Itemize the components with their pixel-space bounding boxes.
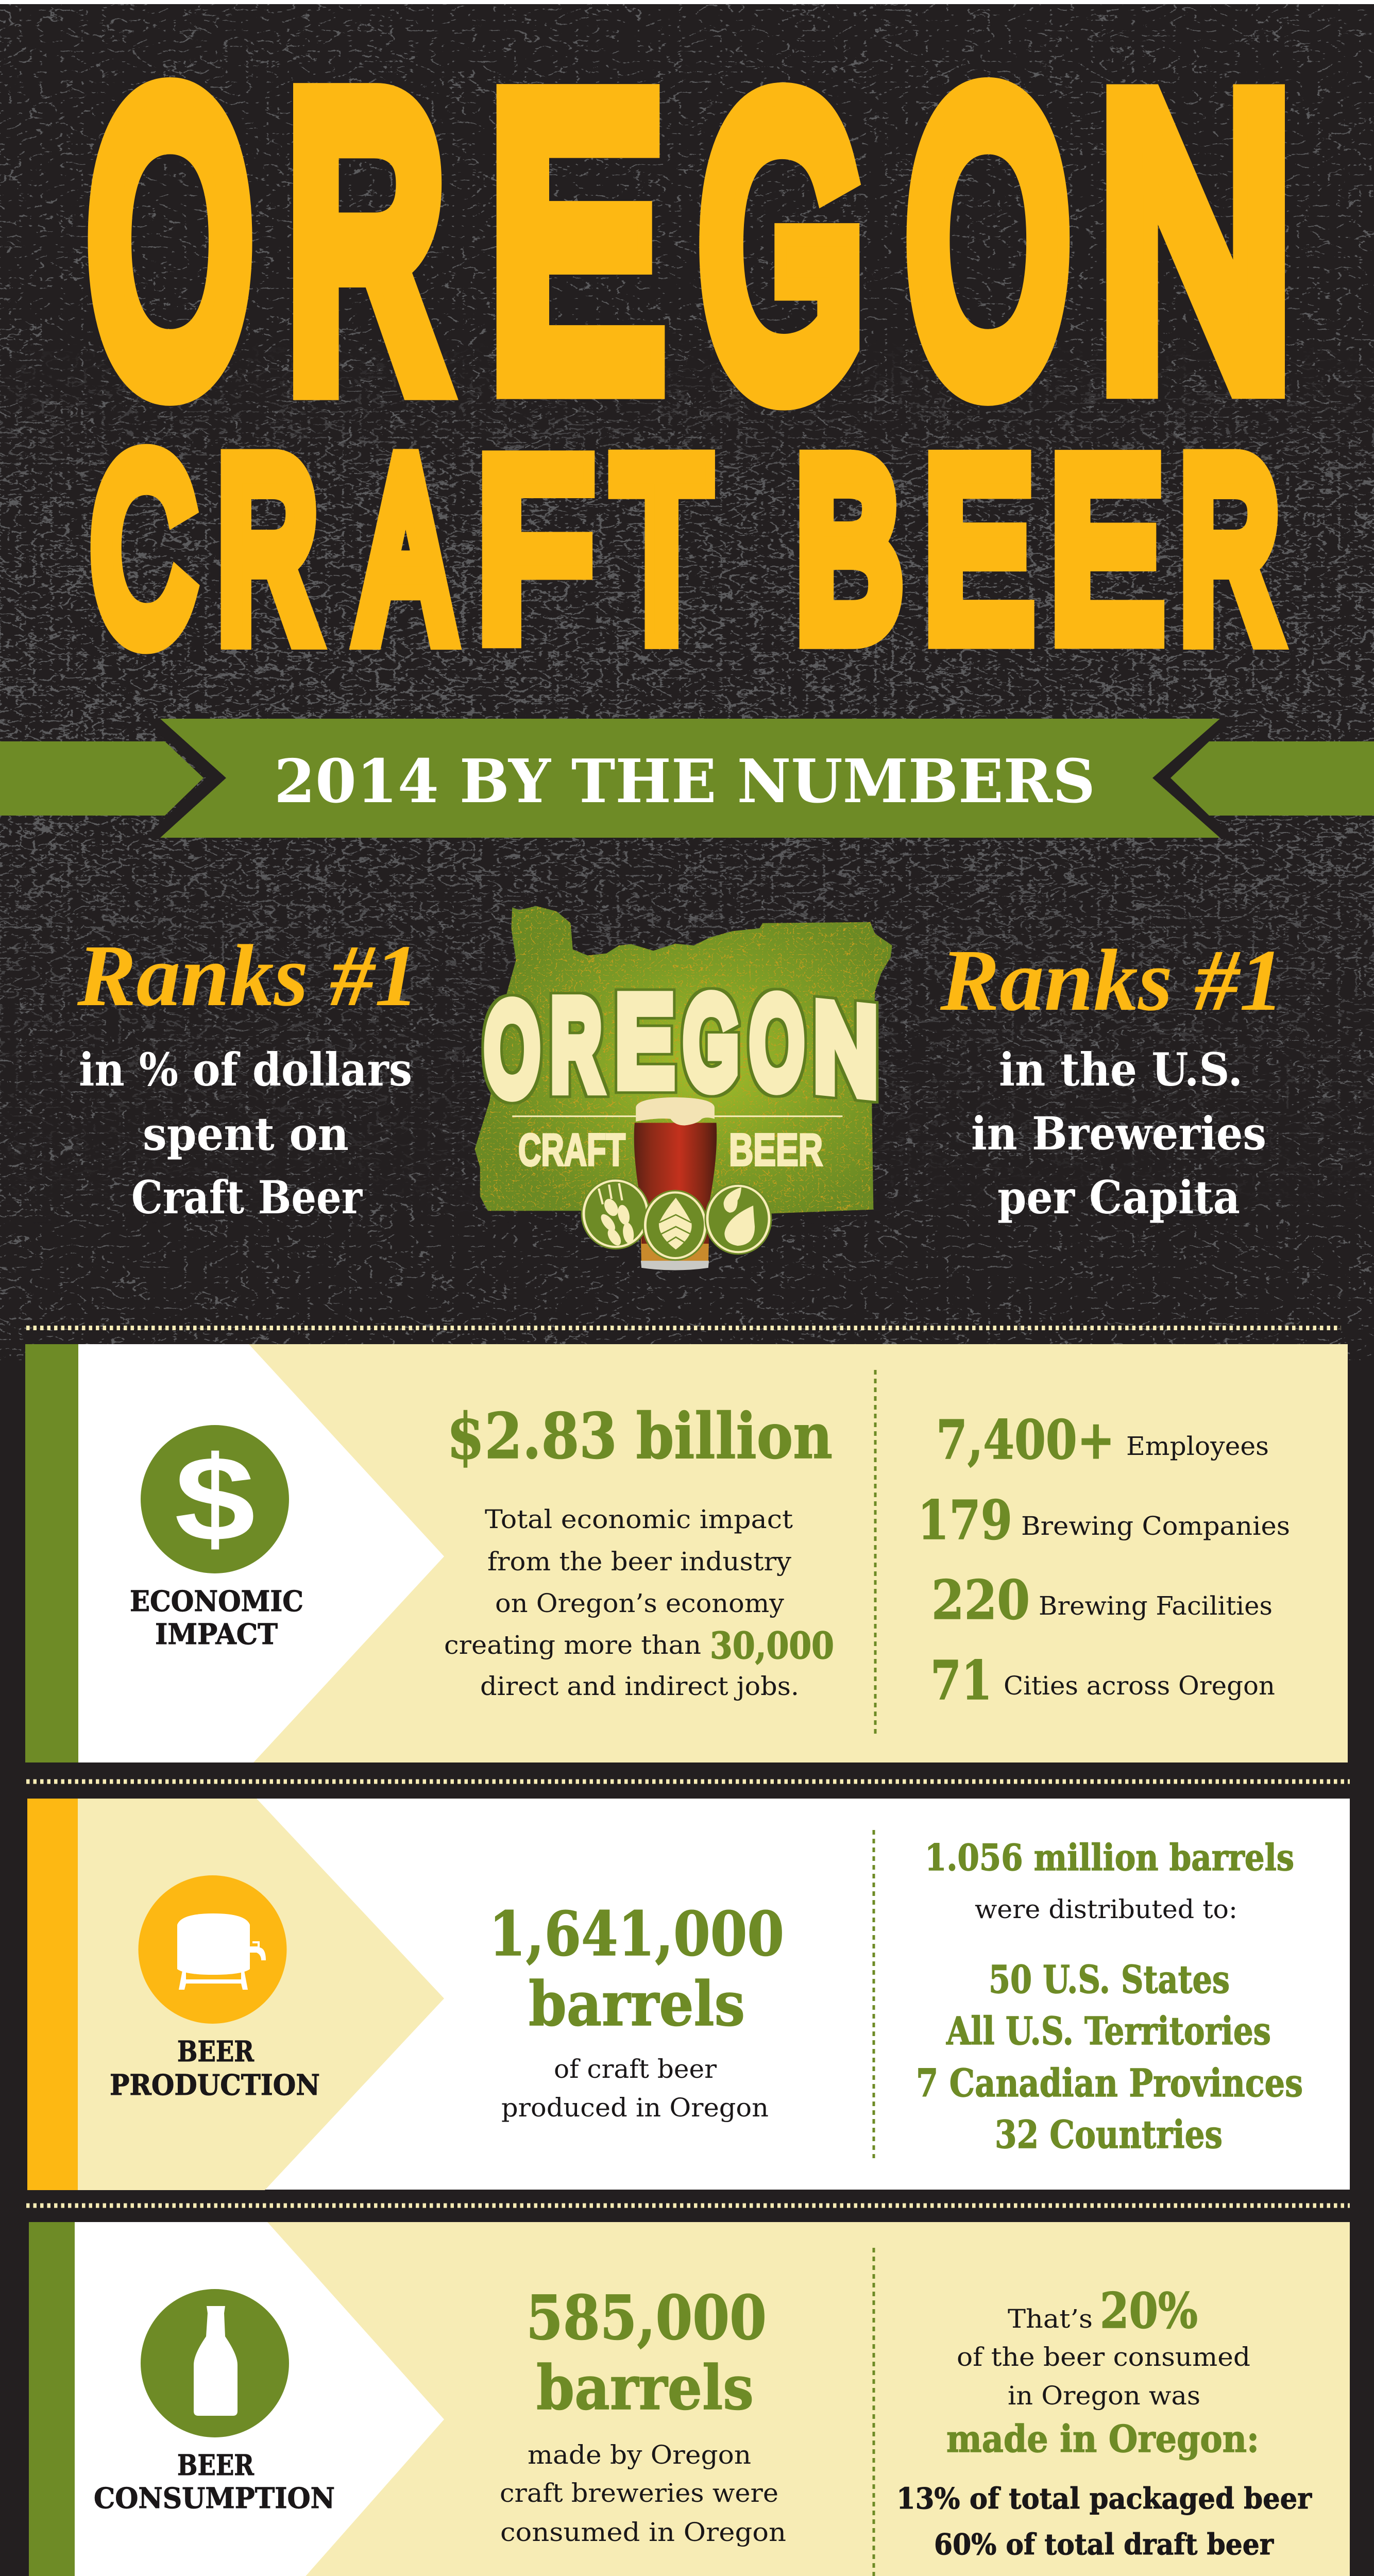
list: economic figures: 220	[931, 1568, 1030, 1632]
body: total economic impact: 30,000	[710, 1624, 834, 1667]
stat: 1,641,000 barrels: 1,641,000	[489, 1898, 784, 1970]
heading: beer production: PRODUCTION	[110, 2068, 320, 2102]
title: CRAFT BEER: R	[1181, 412, 1279, 686]
body: total economic impact	[444, 1504, 834, 1701]
stat: $2.83 billion: $2.83 billion	[447, 1399, 833, 1473]
list: economic figures: 7,400+	[936, 1408, 1115, 1471]
badge: hop	[642, 1190, 708, 1261]
title: OREGON	[90, 19, 1292, 468]
Oregon Craft Beer logo	[475, 906, 892, 1270]
badge: water drops	[705, 1183, 772, 1255]
list: economic figures: 179	[918, 1488, 1012, 1552]
dotted divider 1	[26, 1326, 1341, 1330]
list: share of beer consumed: That’s	[1008, 2304, 1093, 2334]
list: distribution: 50 U.S. States	[989, 1958, 1230, 2002]
body: total economic impact: on Oregon’s economy	[495, 1588, 785, 1618]
stat: 585,000 barrels: 585,000	[526, 2282, 767, 2353]
icon: dollar sign	[141, 1425, 289, 1573]
list: share of beer consumed: of the beer consumed	[957, 2342, 1250, 2372]
logo words CRAFT BEER	[518, 1124, 823, 1175]
heading: economic impact: IMPACT	[155, 1617, 278, 1651]
icon: brewing tank	[138, 1875, 286, 2024]
heading: beer consumption: BEER	[177, 2448, 255, 2482]
title: CRAFT BEER: E	[1051, 412, 1161, 686]
body: total economic impact: Total economic impact	[485, 1504, 793, 1534]
panel: beer production	[27, 1799, 1350, 2190]
title: CRAFT BEER: A	[362, 412, 450, 686]
body: made by Oregon craft breweries	[500, 2440, 786, 2547]
heading: economic impact: ECONOMIC	[130, 1584, 303, 1618]
list: share of beer consumed: made in Oregon:	[946, 2417, 1259, 2461]
title: OREGON: O	[909, 19, 1067, 464]
left stat: ranks #1 dollars: Craft Beer	[131, 1171, 363, 1224]
dotted divider 2	[26, 1780, 1350, 1784]
stat: 1,641,000 barrels	[489, 1898, 784, 2040]
logo word OREGON: E	[616, 973, 672, 1109]
list: distribution: 32 Countries	[995, 2113, 1223, 2157]
list: economic figures: Employees	[1126, 1431, 1269, 1461]
logo word OREGON	[486, 973, 877, 1118]
heading: beer production	[110, 2035, 320, 2102]
title: CRAFT BEER: E	[925, 413, 1031, 686]
icon: beer bottle	[141, 2289, 289, 2437]
stat: 585,000 barrels: barrels	[536, 2352, 754, 2424]
left stat: ranks #1 dollars: in % of dollars	[79, 1043, 412, 1096]
body: total economic impact: direct and indirect jobs.	[480, 1671, 799, 1701]
logo word OREGON: R	[551, 977, 601, 1112]
list: economic figures: Brewing Facilities	[1039, 1591, 1273, 1621]
body: total economic impact: from the beer industry	[487, 1547, 792, 1577]
logo word OREGON: N	[815, 980, 877, 1118]
list: economic figures: Cities across Oregon	[1004, 1671, 1275, 1701]
list: distribution: 7 Canadian Provinces	[916, 2061, 1303, 2106]
dotted divider 3	[26, 2203, 1350, 2208]
title: CRAFT BEER: F	[478, 412, 591, 686]
stat: 1,641,000 barrels: barrels	[529, 1968, 745, 2040]
textured chalkboard background	[0, 0, 1374, 1360]
logo word OREGON: O	[486, 980, 538, 1118]
list: distribution: All U.S. Territories	[946, 2009, 1271, 2054]
three ingredient badges	[581, 1178, 772, 1261]
logo word OREGON: G	[685, 974, 738, 1112]
title: OREGON: N	[1099, 21, 1292, 461]
icon: dollar sign: $	[175, 1431, 255, 1567]
heading: beer consumption	[94, 2448, 335, 2515]
left stat: ranks #1 dollars: spent on	[143, 1107, 349, 1161]
list: distribution: were distributed to:	[975, 1894, 1237, 1924]
right stat: ranks #1 breweries: in the U.S.	[999, 1043, 1243, 1096]
list: share of beer consumed: 20%	[1100, 2282, 1198, 2340]
title: CRAFT BEER: C	[92, 408, 193, 689]
right stat: ranks #1 breweries	[940, 931, 1284, 1224]
list: share of beer consumed: 13% of total packaged beer	[896, 2482, 1312, 2516]
panel: economic impact	[25, 1344, 1348, 1762]
left stat: ranks #1 dollars: Ranks #1	[77, 927, 419, 1024]
stat: 585,000 barrels	[526, 2282, 767, 2424]
title: OREGON: E	[489, 20, 661, 461]
list: economic figures: 71	[930, 1649, 992, 1712]
right stat: ranks #1 breweries: per Capita	[997, 1171, 1240, 1224]
badge: barley	[581, 1178, 650, 1249]
heading: economic impact	[130, 1584, 303, 1651]
logo words CRAFT BEER: CRAFT	[518, 1124, 625, 1175]
title: CRAFT BEER: T	[615, 412, 709, 686]
body: of craft beer	[501, 2054, 769, 2123]
logo words CRAFT BEER: BEER	[729, 1124, 823, 1175]
ribbon text: 2014 BY THE NUMBERS	[274, 747, 1095, 817]
list: share of beer consumed: 60% of total draft beer	[934, 2528, 1274, 2562]
Oregon state silhouette	[475, 906, 892, 1214]
title: OREGON: R	[288, 21, 445, 461]
logo word OREGON: O	[751, 974, 803, 1111]
list: share of beer consumed: in Oregon was	[1008, 2381, 1200, 2411]
heading: beer production: BEER	[177, 2035, 255, 2068]
title: OREGON: O	[90, 19, 250, 464]
list: distribution	[916, 1836, 1303, 2157]
list: share of beer consumed	[896, 2282, 1312, 2562]
list: distribution: 1.056 million barrels	[925, 1836, 1294, 1879]
ribbon banner	[0, 719, 1374, 838]
beer glass	[634, 1097, 717, 1270]
body: of craft beer: of craft beer	[554, 2054, 717, 2084]
title: OREGON: G	[701, 23, 863, 468]
list: economic figures	[918, 1408, 1290, 1712]
list: economic figures: Brewing Companies	[1021, 1511, 1290, 1541]
title: CRAFT BEER: R	[218, 412, 317, 686]
right stat: ranks #1 breweries: in Breweries	[971, 1107, 1266, 1160]
body: made by Oregon craft breweries: consumed in Oregon	[500, 2517, 786, 2547]
left stat: ranks #1 dollars	[77, 927, 419, 1224]
heading: beer consumption: CONSUMPTION	[94, 2481, 335, 2515]
body: of craft beer: produced in Oregon	[501, 2093, 769, 2123]
body: total economic impact: creating more than	[444, 1630, 701, 1660]
body: made by Oregon craft breweries: craft breweries were	[500, 2478, 778, 2508]
right stat: ranks #1 breweries: Ranks #1	[940, 931, 1284, 1029]
title: CRAFT BEER	[92, 408, 1279, 689]
body: made by Oregon craft breweries: made by Oregon	[528, 2440, 751, 2470]
title: CRAFT BEER: B	[796, 412, 901, 686]
panel: beer consumption	[29, 2222, 1350, 2576]
